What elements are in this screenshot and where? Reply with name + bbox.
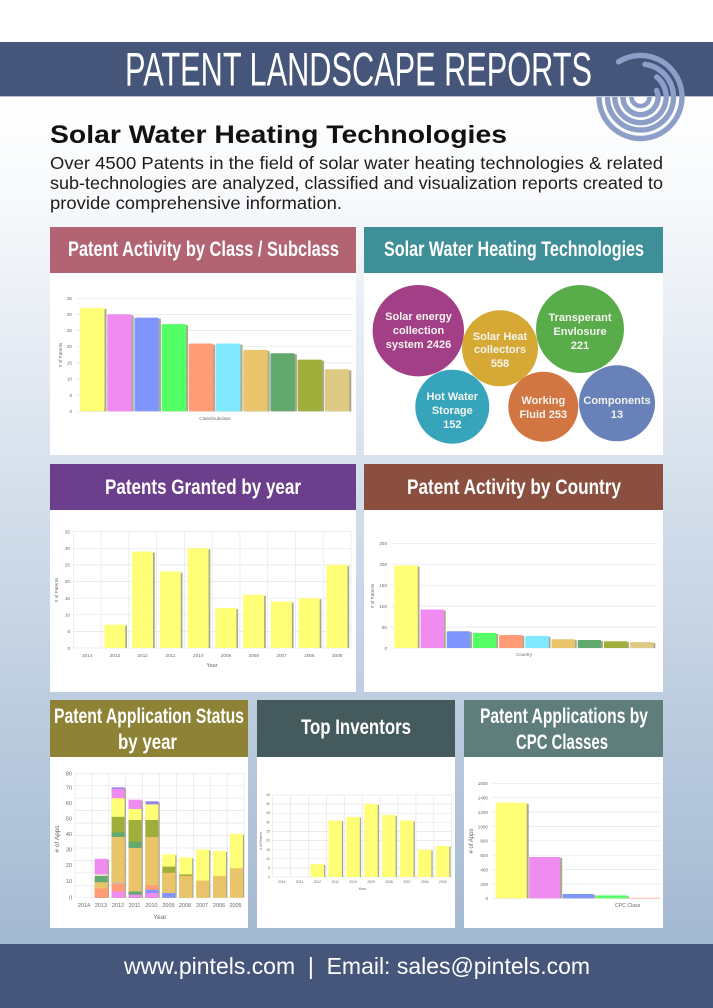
bar chart: cpc classes: 1200 bbox=[478, 810, 488, 815]
panel heading: Solar Water Heating Technologies bbox=[384, 238, 644, 261]
stacked bar chart: status by year: 60 bbox=[66, 801, 72, 807]
bar chart: country: 200 bbox=[379, 562, 387, 567]
bar chart: granted by year: # of Patents bbox=[54, 577, 59, 602]
bar chart: granted by year: 2014 bbox=[82, 653, 93, 658]
bubble: transparent envlosure: Transperant bbox=[549, 312, 612, 324]
panel heading bbox=[257, 700, 455, 757]
panel heading: Patents Granted by year bbox=[105, 476, 301, 499]
stacked bar chart: status by year: 30 bbox=[66, 848, 72, 854]
bar chart: granted by year: 2010 bbox=[193, 653, 204, 658]
bar chart: cpc classes bbox=[469, 781, 661, 909]
panel heading bbox=[464, 700, 663, 757]
bar chart: granted by year: 2009 bbox=[221, 653, 232, 658]
bar chart: granted by year: 15 bbox=[65, 596, 70, 601]
panel: patent applications by cpc classes bbox=[464, 700, 663, 928]
bar chart: country: # of Patents bbox=[370, 583, 375, 608]
panel heading bbox=[50, 227, 356, 273]
bar chart: class / subclass: 5 bbox=[69, 393, 72, 398]
bar chart: class / subclass: 15 bbox=[67, 360, 72, 366]
bar chart: top inventors: 15 bbox=[266, 848, 270, 852]
bubble: solar heat collectors: 558 bbox=[491, 358, 509, 370]
panel heading: Patent Activity by Class / Subclass bbox=[68, 238, 339, 261]
bar chart: granted by year: 25 bbox=[65, 562, 70, 568]
bar chart: granted by year: 2005 bbox=[332, 653, 343, 658]
bar chart: class / subclass: # of Patents bbox=[58, 342, 63, 367]
2012 stack bbox=[112, 787, 125, 898]
bar chart: top inventors: 2013 bbox=[296, 880, 303, 884]
bar chart: granted by year: 2011 bbox=[166, 653, 176, 658]
bar chart: top inventors: Year bbox=[358, 887, 367, 891]
bar chart: country: 50 bbox=[382, 625, 387, 630]
stacked bar chart: status by year: 20 bbox=[66, 863, 72, 869]
bar chart: top inventors: 0 bbox=[268, 875, 270, 879]
bar chart: class / subclass: 30 bbox=[67, 312, 72, 317]
2005 stack bbox=[230, 834, 243, 898]
panel heading bbox=[364, 464, 663, 510]
panel heading: Patent Activity by Country bbox=[407, 476, 621, 499]
bar chart: top inventors: 2012 bbox=[314, 880, 321, 884]
panel heading bbox=[50, 700, 248, 757]
bar chart: top inventors: 2014 bbox=[278, 880, 285, 884]
bubble: solar heat collectors: collectors bbox=[474, 344, 526, 356]
bar chart: top inventors: 5 bbox=[268, 866, 270, 870]
bar chart: cpc classes: 800 bbox=[480, 839, 488, 844]
2008 stack bbox=[179, 857, 192, 898]
2007 stack bbox=[196, 850, 209, 898]
stacked bar chart: status by year: 2007 bbox=[196, 903, 208, 909]
bar chart: granted by year bbox=[54, 530, 351, 669]
footer contact text: www.pintels.com | Email: sales@pintels.com bbox=[123, 953, 590, 979]
stacked bar chart: status by year: 2012 bbox=[112, 903, 124, 909]
panel heading: by year bbox=[118, 731, 177, 754]
bar chart: class / subclass: 25 bbox=[67, 328, 72, 333]
bar chart: class / subclass: Class/Subclass bbox=[199, 416, 231, 421]
bar chart: top inventors: 2007 bbox=[403, 880, 411, 884]
2013 stack bbox=[95, 859, 108, 898]
bubble: solar energy collection system bbox=[373, 285, 464, 376]
bar chart: granted by year: 0 bbox=[67, 646, 70, 651]
bar chart: country: 0 bbox=[384, 646, 387, 651]
bar chart: top inventors: 30 bbox=[266, 820, 270, 824]
bar chart: granted by year: 2006 bbox=[304, 653, 315, 658]
bar chart: cpc classes: 600 bbox=[480, 853, 488, 858]
bar chart: granted by year: Year bbox=[206, 663, 218, 669]
stacked bar chart: status by year: Year bbox=[153, 914, 167, 921]
bar chart: country: 150 bbox=[379, 583, 387, 588]
bubble: solar energy collection system: system 2426 bbox=[386, 339, 451, 351]
bubble: hot water storage: Hot Water bbox=[427, 391, 479, 403]
bar chart: top inventors: 25 bbox=[266, 830, 270, 834]
bar chart: top inventors: 2005 bbox=[439, 880, 447, 884]
stacked bar chart: status by year: 80 bbox=[66, 771, 72, 777]
heading: Solar Water Heating Technologies bbox=[50, 121, 507, 149]
bar chart: class / subclass: 0 bbox=[69, 409, 72, 414]
panel: solar water heating technologies bbox=[364, 227, 663, 455]
panel heading: Top Inventors bbox=[301, 716, 411, 739]
bar chart: class / subclass: 10 bbox=[67, 376, 72, 382]
2011 stack bbox=[128, 800, 142, 898]
icon: spiral logo bbox=[599, 55, 682, 138]
panel: patents granted by year bbox=[50, 464, 356, 692]
stacked bar chart: status by year: 2005 bbox=[229, 903, 242, 909]
panel: top inventors bbox=[257, 700, 455, 928]
bar chart: cpc classes: 0 bbox=[485, 896, 488, 901]
bubble: working fluid: Working bbox=[521, 395, 565, 407]
bar chart: cpc classes: 1400 bbox=[478, 796, 488, 800]
bar chart: top inventors: 2006 bbox=[421, 880, 429, 884]
bar chart: class / subclass: 20 bbox=[67, 344, 72, 349]
stacked bar chart: status by year: 2011 bbox=[129, 903, 140, 909]
bar chart: top inventors: 2011 bbox=[332, 880, 339, 884]
stacked bar chart: status by year bbox=[54, 771, 244, 921]
bar chart: country: 100 bbox=[379, 604, 387, 609]
bubble: solar energy collection system: Solar energy bbox=[385, 311, 453, 323]
bar chart: top inventors: 10 bbox=[266, 857, 270, 861]
bar chart: granted by year: 2013 bbox=[110, 653, 121, 658]
bar chart: granted by year: 10 bbox=[65, 612, 70, 618]
stacked bar chart: status by year: 40 bbox=[66, 832, 72, 838]
stacked bar chart: status by year: 2006 bbox=[213, 903, 225, 909]
bar chart: top inventors bbox=[259, 793, 452, 891]
panel: patent activity by country bbox=[364, 464, 663, 692]
footer band bbox=[0, 944, 713, 1008]
stacked bar chart: status by year: 2014 bbox=[78, 903, 90, 909]
bubble: solar heat collectors bbox=[462, 310, 538, 386]
bar chart: top inventors: 40 bbox=[266, 802, 270, 806]
bar chart: country: 250 bbox=[379, 541, 387, 546]
intro text: provide comprehensive information. bbox=[50, 193, 342, 213]
bar chart: class / subclass: 35 bbox=[67, 296, 72, 301]
bar chart: granted by year: 2012 bbox=[138, 653, 148, 658]
bar chart: top inventors: 2008 bbox=[385, 880, 393, 884]
panel heading bbox=[364, 227, 663, 273]
bubble: working fluid: Fluid 253 bbox=[519, 409, 567, 421]
bubble: transparent envlosure bbox=[536, 285, 624, 373]
bar chart: cpc classes: 400 bbox=[480, 867, 488, 872]
stacked bar chart: status by year: 2013 bbox=[95, 903, 107, 909]
panel heading bbox=[50, 464, 356, 510]
bar chart: cpc classes: # of Apps bbox=[469, 828, 475, 854]
panel: patent application status by year bbox=[50, 700, 248, 928]
bar chart: cpc classes: 1000 bbox=[478, 824, 488, 829]
bar chart: class / subclass bbox=[58, 296, 353, 421]
intro text bbox=[50, 153, 663, 213]
stacked bar chart: status by year: 2010 bbox=[145, 903, 158, 909]
intro text: Over 4500 Patents in the field of solar water heating technologies & related bbox=[50, 153, 663, 173]
bar chart: top inventors: 20 bbox=[266, 838, 270, 842]
bar chart: granted by year: 2007 bbox=[276, 653, 287, 658]
2006 stack bbox=[213, 851, 226, 898]
bubble: transparent envlosure: 221 bbox=[571, 340, 589, 352]
bubble: transparent envlosure: Envlosure bbox=[553, 326, 607, 338]
stacked bar chart: status by year: 10 bbox=[66, 879, 72, 885]
bar chart: top inventors: 2010 bbox=[349, 880, 357, 884]
intro text: sub-technologies are analyzed, classified and visualization reports created to bbox=[50, 173, 663, 193]
bar chart: cpc classes: 1600 bbox=[478, 781, 488, 786]
bubble: solar heat collectors: Solar Heat bbox=[473, 331, 528, 343]
bubble: components bbox=[579, 365, 655, 441]
bar chart: cpc classes: CPC Class bbox=[615, 903, 641, 909]
bar chart: top inventors: # of Patents bbox=[259, 832, 263, 850]
bar chart: granted by year: 20 bbox=[65, 579, 70, 584]
bubble: hot water storage: 152 bbox=[443, 419, 461, 431]
panel heading: Patent Application Status bbox=[54, 705, 244, 728]
bubble: components: Components bbox=[583, 395, 651, 407]
stacked bar chart: status by year: 50 bbox=[66, 817, 72, 823]
bubble: components: 13 bbox=[611, 409, 623, 421]
stacked bar chart: status by year: 2009 bbox=[162, 903, 175, 909]
stacked bar chart: status by year: # of Apps bbox=[54, 825, 61, 853]
stacked bar chart: status by year: 0 bbox=[69, 896, 72, 902]
bubble: hot water storage: Storage bbox=[432, 405, 473, 417]
bar chart: top inventors: 45 bbox=[266, 793, 270, 797]
panel heading: Patent Applications by bbox=[480, 705, 648, 728]
bar chart: granted by year: 2008 bbox=[249, 653, 259, 658]
stacked bar chart: status by year: 2008 bbox=[179, 903, 191, 909]
bar chart: country: Country bbox=[516, 652, 533, 657]
bubble: working fluid bbox=[508, 372, 578, 442]
bar chart: granted by year: 30 bbox=[65, 546, 70, 551]
bar chart: top inventors: 35 bbox=[266, 811, 270, 815]
bar chart: top inventors: 2009 bbox=[367, 880, 375, 884]
panel: patent activity by class bbox=[50, 227, 356, 455]
bar chart: cpc classes: 200 bbox=[480, 882, 488, 887]
panel heading: CPC Classes bbox=[516, 731, 608, 754]
bar chart: granted by year: 35 bbox=[65, 530, 70, 534]
bar chart: granted by year: 5 bbox=[67, 629, 70, 634]
stacked bar chart: status by year: 70 bbox=[66, 786, 72, 792]
header band bbox=[0, 42, 713, 97]
bubble: hot water storage bbox=[415, 370, 489, 444]
bubble: solar energy collection system: collection bbox=[393, 325, 444, 337]
2010 stack bbox=[145, 801, 158, 898]
bar chart: country bbox=[370, 541, 658, 657]
2009 stack bbox=[162, 854, 175, 898]
